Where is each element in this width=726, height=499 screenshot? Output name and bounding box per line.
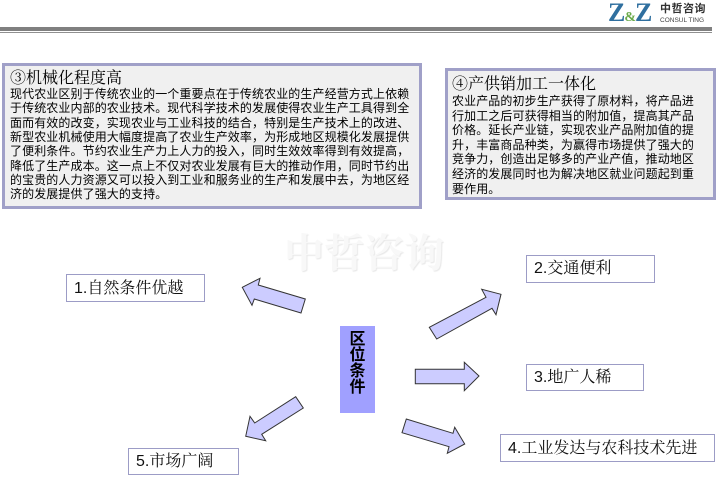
box: broad market: 5.市场广阔 bbox=[136, 453, 213, 470]
center block: location conditions: 区 bbox=[349, 331, 366, 348]
box: industry and technology bbox=[500, 434, 715, 462]
panel body text: 了便利条件。节约农业生产力上人力的投入，同时生效效率得到有效提高， bbox=[10, 144, 409, 158]
panel: integration bbox=[445, 68, 716, 200]
box: broad market bbox=[128, 448, 239, 475]
box: sparse population: 3.地广人稀 bbox=[534, 369, 611, 386]
panel body text: 升，丰富商品种类，为赢得市场提供了强大的 bbox=[452, 138, 694, 152]
center block: location conditions: 件 bbox=[349, 379, 366, 396]
panel body text: 竞争力，创造出足够多的产业产值，推动地区 bbox=[452, 152, 694, 166]
panel body text: 经济的发展同时也为解决地区就业问题起到重 bbox=[452, 167, 694, 181]
box: transport bbox=[526, 255, 655, 283]
panel body text: 行加工之后可获得相当的附加值，提高其产品 bbox=[452, 109, 694, 123]
panel body text: 新型农业机械使用大幅度提高了农业生产效率，为形成地区规模化发展提供 bbox=[10, 130, 409, 144]
arrow to box 2 bbox=[429, 289, 501, 339]
center block: location conditions: 位 bbox=[349, 347, 366, 364]
logo english name: CONSUL TING bbox=[660, 17, 704, 24]
panel body text: 济的发展提供了强大的支持。 bbox=[10, 187, 167, 201]
arrow to box 5 bbox=[246, 397, 303, 441]
box: natural conditions bbox=[66, 274, 205, 302]
box: sparse population bbox=[526, 364, 644, 391]
logo chinese name: 中哲咨询 bbox=[660, 3, 706, 15]
panel body text: 降低了生产成本。这一点上不仅对农业发展有巨大的推动作用，同时节约出 bbox=[10, 158, 409, 172]
panel body text bbox=[10, 87, 409, 201]
panel heading: ④产供销加工一体化 bbox=[452, 76, 596, 93]
panel heading: ③机械化程度高 bbox=[10, 70, 122, 87]
panel: mechanization bbox=[2, 63, 422, 209]
box: natural conditions: 1.自然条件优越 bbox=[74, 280, 183, 297]
panel body text: 的宝贵的人力资源又可以投入到工业和服务业的生产和发展中去，为地区经 bbox=[10, 173, 409, 187]
arrow to box 4 bbox=[402, 419, 465, 453]
center block: location conditions bbox=[340, 326, 375, 413]
center block: location conditions: 条 bbox=[349, 363, 366, 380]
box: industry and technology: 4.工业发达与农科技术先进 bbox=[508, 440, 697, 457]
panel body text: 现代农业区别于传统农业的一个重要点在于传统农业的生产经营方式上依赖 bbox=[10, 87, 409, 101]
panel body text: 要作用。 bbox=[452, 182, 500, 196]
header rule bbox=[0, 27, 712, 33]
box: transport: 2.交通便利 bbox=[534, 260, 611, 277]
logo bbox=[608, 0, 706, 27]
panel body text bbox=[452, 94, 694, 196]
panel body text: 于传统农业内部的农业技术。现代科学技术的发展使得农业生产工具得到全 bbox=[10, 101, 409, 115]
panel body text: 农业产品的初步生产获得了原材料，将产品进 bbox=[452, 94, 694, 108]
arrow to box 3 bbox=[415, 362, 479, 391]
arrow to box 1 bbox=[242, 278, 305, 313]
watermark: 中哲咨询 bbox=[284, 222, 444, 279]
panel body text: 面而有效的改变，实现农业与工业科技的结合，特别是生产技术上的改进、 bbox=[10, 116, 409, 130]
panel body text: 价格。延长产业链，实现农业产品附加值的提 bbox=[452, 123, 694, 137]
